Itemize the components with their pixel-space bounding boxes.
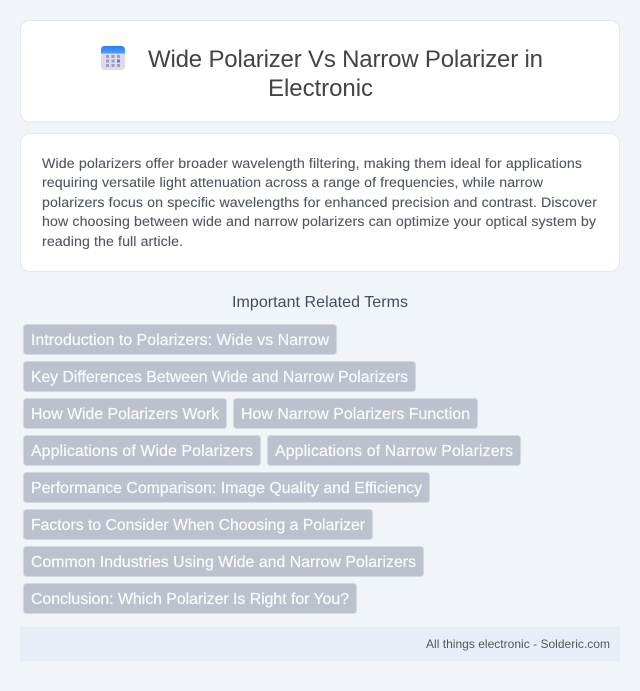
title	[148, 46, 543, 102]
title: Electronic	[268, 75, 373, 102]
tag: applications of wide polarizers	[24, 436, 260, 466]
tag: factors to consider: Factors to Consider When Choosing a Polarizer	[31, 517, 365, 534]
tag: common industries: Common Industries Using Wide and Narrow Polarizers	[31, 554, 416, 571]
tag: key differences: Key Differences Between Wide and Narrow Polarizers	[31, 369, 408, 386]
text block: description	[42, 156, 597, 250]
tag: performance comparison: Performance Comparison: Image Quality and Efficiency	[31, 480, 422, 497]
footer: All things electronic - Solderic.com	[426, 637, 610, 651]
tag: conclusion	[24, 584, 356, 614]
tag: introduction: Introduction to Polarizers: Wide vs Narrow	[31, 332, 330, 349]
text block: description: requiring versatile light attenuation across a range of frequencies, while narrow	[42, 175, 544, 191]
icon: calendar	[101, 46, 125, 70]
tag: applications of narrow polarizers: Applications of Narrow Polarizers	[275, 443, 513, 460]
tag: applications of narrow polarizers	[268, 436, 520, 466]
tag: key differences	[24, 362, 416, 392]
panel: description	[20, 134, 620, 272]
tag: performance comparison	[24, 472, 430, 502]
text block: description: how choosing between wide and narrow polarizers can optimize your optical system by	[42, 214, 597, 230]
tag: applications of wide polarizers: Applications of Wide Polarizers	[31, 443, 253, 460]
title: Wide Polarizer Vs Narrow Polarizer in	[148, 46, 543, 73]
text block: description: polarizers focus on specific wavelengths for enhanced precision and contrast. Discover	[42, 195, 597, 211]
tag: how narrow polarizers function	[234, 398, 478, 428]
tag: conclusion: Conclusion: Which Polarizer Is Right for You?	[31, 591, 349, 608]
tag: introduction	[24, 324, 336, 354]
text block: description: reading the full article.	[42, 234, 183, 250]
heading: important related terms: Important Related Terms	[232, 294, 408, 311]
tag: how wide polarizers work	[24, 398, 226, 428]
tag: how narrow polarizers function: How Narrow Polarizers Function	[241, 406, 470, 423]
tag: common industries	[24, 546, 424, 576]
footer	[20, 627, 620, 661]
text block: description: Wide polarizers offer broader wavelength filtering, making them ideal for applications	[42, 156, 582, 172]
tag: how wide polarizers work: How Wide Polarizers Work	[31, 406, 219, 423]
tag: factors to consider	[24, 510, 372, 540]
panel: related term tags	[24, 324, 520, 614]
panel: title card	[20, 20, 620, 122]
